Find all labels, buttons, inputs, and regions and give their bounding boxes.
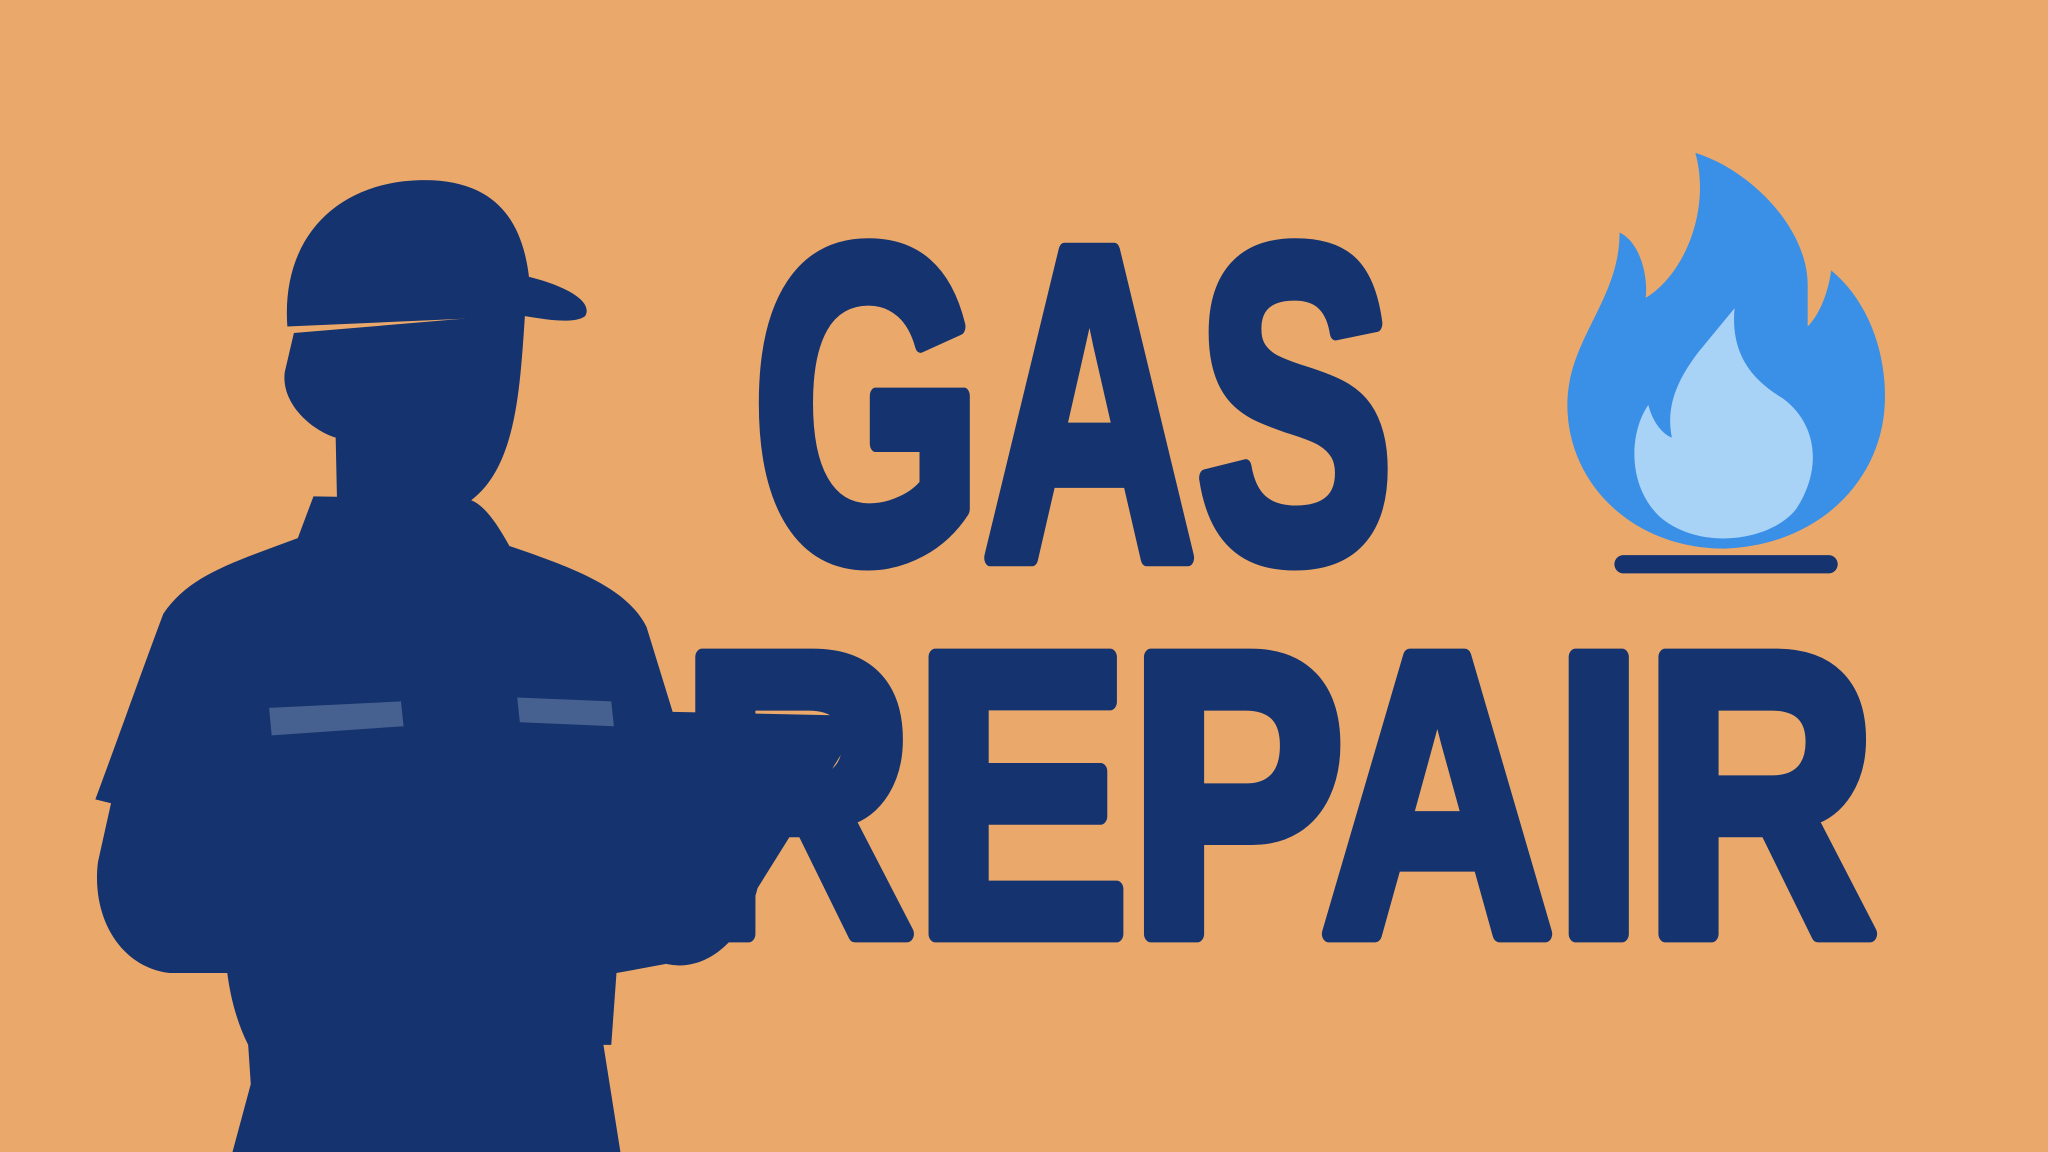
icon: gas flame xyxy=(1567,153,1885,564)
title: GAS: GAS xyxy=(752,156,1394,653)
illustration: gas technician silhouette xyxy=(95,180,863,1152)
badges on chest xyxy=(269,697,614,735)
